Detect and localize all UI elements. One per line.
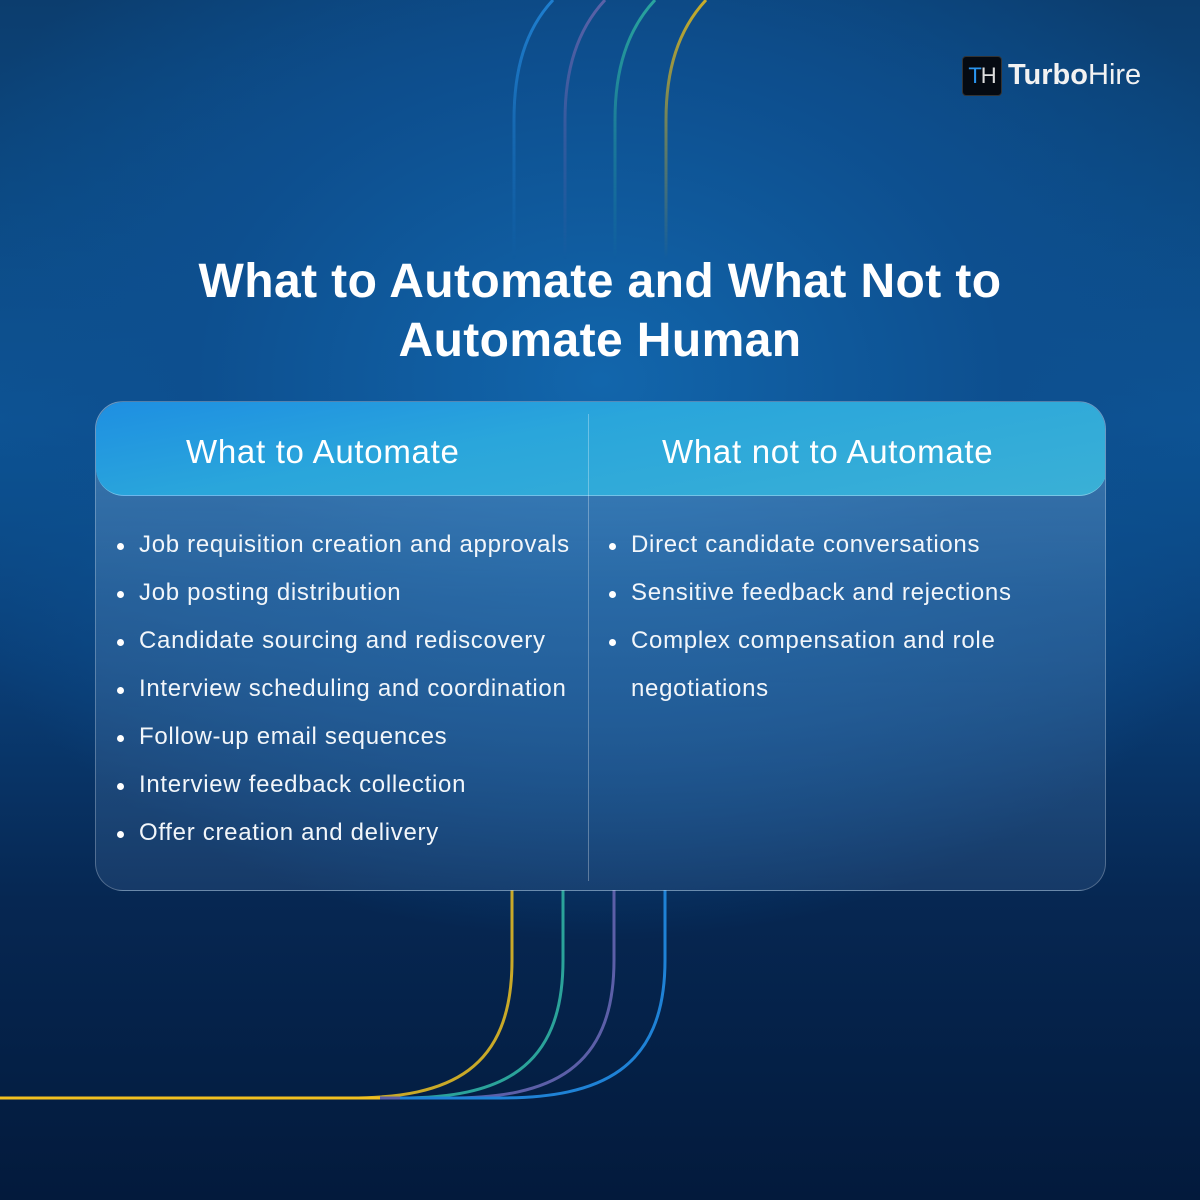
title xyxy=(198,255,1001,367)
logo xyxy=(962,56,1141,96)
heading: what not to automate: What not to Automate xyxy=(662,433,993,470)
list: automate: Interview feedback collection xyxy=(139,771,466,798)
list: not automate: Direct candidate conversations xyxy=(631,531,980,558)
list: automate: Candidate sourcing and rediscovery xyxy=(139,627,546,654)
list: not automate: Sensitive feedback and rejections xyxy=(631,579,1012,606)
list: automate: Offer creation and delivery xyxy=(139,819,439,846)
list: not automate: negotiations xyxy=(631,675,769,702)
list: automate: Job requisition creation and approvals xyxy=(139,531,570,558)
list: automate xyxy=(117,531,570,846)
decorative lines top xyxy=(0,0,707,1100)
list: automate: Follow-up email sequences xyxy=(139,723,447,750)
panel: comparison table xyxy=(95,401,1106,891)
title: Automate Human xyxy=(399,314,801,367)
heading: what to automate: What to Automate xyxy=(186,433,460,470)
title: What to Automate and What Not to xyxy=(199,255,1001,308)
header bar xyxy=(96,402,1107,496)
icon: TH badge xyxy=(962,56,1002,96)
brand name: TurboHire xyxy=(1008,59,1141,91)
list: not automate xyxy=(609,531,1012,702)
list: not automate: Complex compensation and role xyxy=(631,627,996,654)
divider xyxy=(588,414,589,881)
list: automate: Job posting distribution xyxy=(139,579,401,606)
icon: TH badge: TH xyxy=(968,63,996,88)
list: automate: Interview scheduling and coordination xyxy=(139,675,566,702)
